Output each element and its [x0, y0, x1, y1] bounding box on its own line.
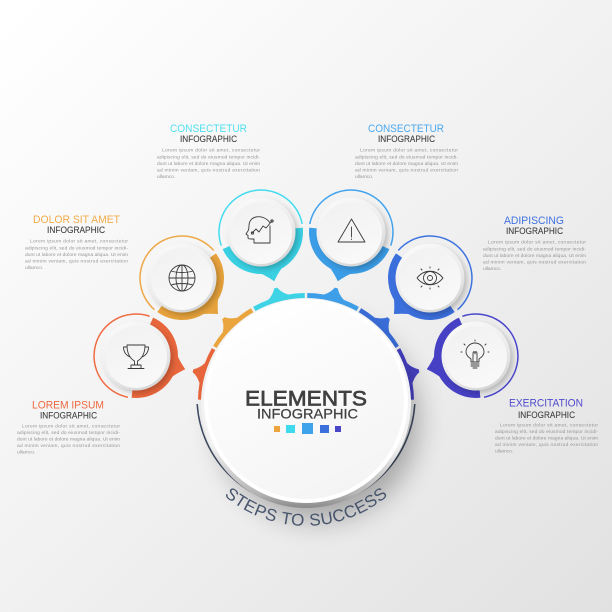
text block: dolor sit amet: Lorem ipsum dolor sit amet, consectetur: [30, 239, 128, 245]
text block: consectetur blue: Lorem ipsum dolor sit amet, consectetur: [360, 148, 458, 154]
icon: warning triangle: [338, 219, 365, 242]
dark lower arc: [197, 404, 415, 506]
segment: royal blue: [356, 299, 408, 351]
text block: exercitation: adipiscing elit, sed do eiusmod tempor incidi-: [495, 429, 598, 435]
node: blue warning: [298, 181, 402, 292]
central title: INFOGRAPHIC: [257, 406, 358, 422]
text block: consectetur blue: ad minim veniam, quis nostrud exercitation: [355, 167, 458, 173]
text block: lorem ipsum: LOREM IPSUM: [32, 400, 104, 412]
text block: dolor sit amet: ad minim veniam, quis nostrud exercitation: [25, 258, 128, 264]
central title: [245, 386, 367, 422]
text block: adipiscing: dunt ut labore et dolore magna aliqua. Ut enim: [483, 253, 586, 259]
text block: adipiscing: [483, 215, 586, 272]
text block: exercitation: [495, 398, 598, 455]
text block: consectetur cyan: ad minim veniam, quis nostrud exercitation: [157, 167, 260, 173]
curved caption: STEPS TO SUCCESS: [226, 488, 386, 526]
text block: consectetur blue: dunt ut labore et dolore magna aliqua. Ut enim: [355, 161, 458, 167]
text block: lorem ipsum: ullamco.: [17, 450, 35, 456]
text block: consectetur blue: adipiscing elit, sed do eiusmod tempor incidi-: [355, 154, 458, 160]
text block: dolor sit amet: ullamco.: [25, 265, 43, 271]
text block: lorem ipsum: INFOGRAPHIC: [40, 410, 97, 420]
text block: adipiscing: adipiscing elit, sed do eiusmod tempor incidi-: [483, 246, 586, 252]
text block: lorem ipsum: ad minim veniam, quis nostrud exercitation: [17, 443, 120, 449]
text block: lorem ipsum: Lorem ipsum dolor sit amet, consectetur: [22, 424, 120, 430]
text block: exercitation: INFOGRAPHIC: [518, 410, 575, 420]
central title: ELEMENTS: [245, 386, 367, 410]
text block: consectetur cyan: INFOGRAPHIC: [180, 134, 237, 144]
text block: consectetur cyan: [157, 123, 260, 180]
text block: dolor sit amet: dunt ut labore et dolore magna aliqua. Ut enim: [25, 252, 128, 258]
segment: red: [186, 345, 218, 401]
text block: dolor sit amet: DOLOR SIT AMET: [33, 214, 120, 226]
text block: exercitation: dunt ut labore et dolore magna aliqua. Ut enim: [495, 436, 598, 442]
text block: lorem ipsum: adipiscing elit, sed do eiusmod tempor incidi-: [17, 430, 120, 436]
central ring segments: [186, 281, 426, 401]
text block: dolor sit amet: INFOGRAPHIC: [47, 225, 105, 235]
text block: lorem ipsum: [17, 400, 120, 456]
icon: eye: [417, 267, 443, 289]
text block: consectetur cyan: ullamco.: [157, 174, 175, 180]
text block: adipiscing: ad minim veniam, quis nostrud exercitation: [483, 259, 586, 265]
node: cyan head: [210, 181, 314, 292]
colour squares: [274, 423, 341, 434]
central button: [201, 298, 418, 520]
text block: adipiscing: ADIPISCING: [504, 215, 564, 227]
text block: consectetur cyan: CONSECTETUR: [170, 123, 247, 135]
icon: globe: [169, 265, 195, 291]
text block: adipiscing: ullamco.: [483, 266, 501, 272]
node: royal eye: [365, 219, 489, 343]
text block: dolor sit amet: [25, 214, 128, 271]
text block: consectetur blue: [355, 123, 458, 180]
segment: orange: [204, 299, 256, 351]
text block: exercitation: EXERCITATION: [509, 398, 583, 410]
text block: consectetur cyan: Lorem ipsum dolor sit amet, consectetur: [162, 148, 260, 154]
segment: purple: [394, 345, 426, 401]
icon: trophy: [124, 345, 148, 368]
node: purple bulb: [416, 305, 527, 409]
text block: exercitation: Lorem ipsum dolor sit amet, consectetur: [500, 423, 598, 429]
text block: consectetur blue: ullamco.: [355, 174, 373, 180]
text block: consectetur cyan: adipiscing elit, sed do eiusmod tempor incidi-: [157, 154, 260, 160]
node: orange globe: [123, 219, 247, 343]
segment: blue: [306, 281, 362, 313]
text block: exercitation: ad minim veniam, quis nostrud exercitation: [495, 442, 598, 448]
text block: dolor sit amet: adipiscing elit, sed do eiusmod tempor incidi-: [25, 245, 128, 251]
text block: consectetur blue: INFOGRAPHIC: [378, 134, 435, 144]
node: red trophy: [85, 305, 196, 409]
text block: consectetur cyan: dunt ut labore et dolore magna aliqua. Ut enim: [157, 161, 260, 167]
icon: light bulb: [461, 340, 489, 368]
text block: lorem ipsum: dunt ut labore et dolore magna aliqua. Ut enim: [17, 437, 120, 443]
text block: exercitation: ullamco.: [495, 449, 513, 455]
text block: adipiscing: INFOGRAPHIC: [506, 226, 563, 236]
segment: cyan: [250, 281, 306, 313]
text block: consectetur blue: CONSECTETUR: [368, 123, 444, 135]
text block: adipiscing: Lorem ipsum dolor sit amet, consectetur: [488, 240, 586, 246]
icon: head with chart: [246, 217, 273, 243]
